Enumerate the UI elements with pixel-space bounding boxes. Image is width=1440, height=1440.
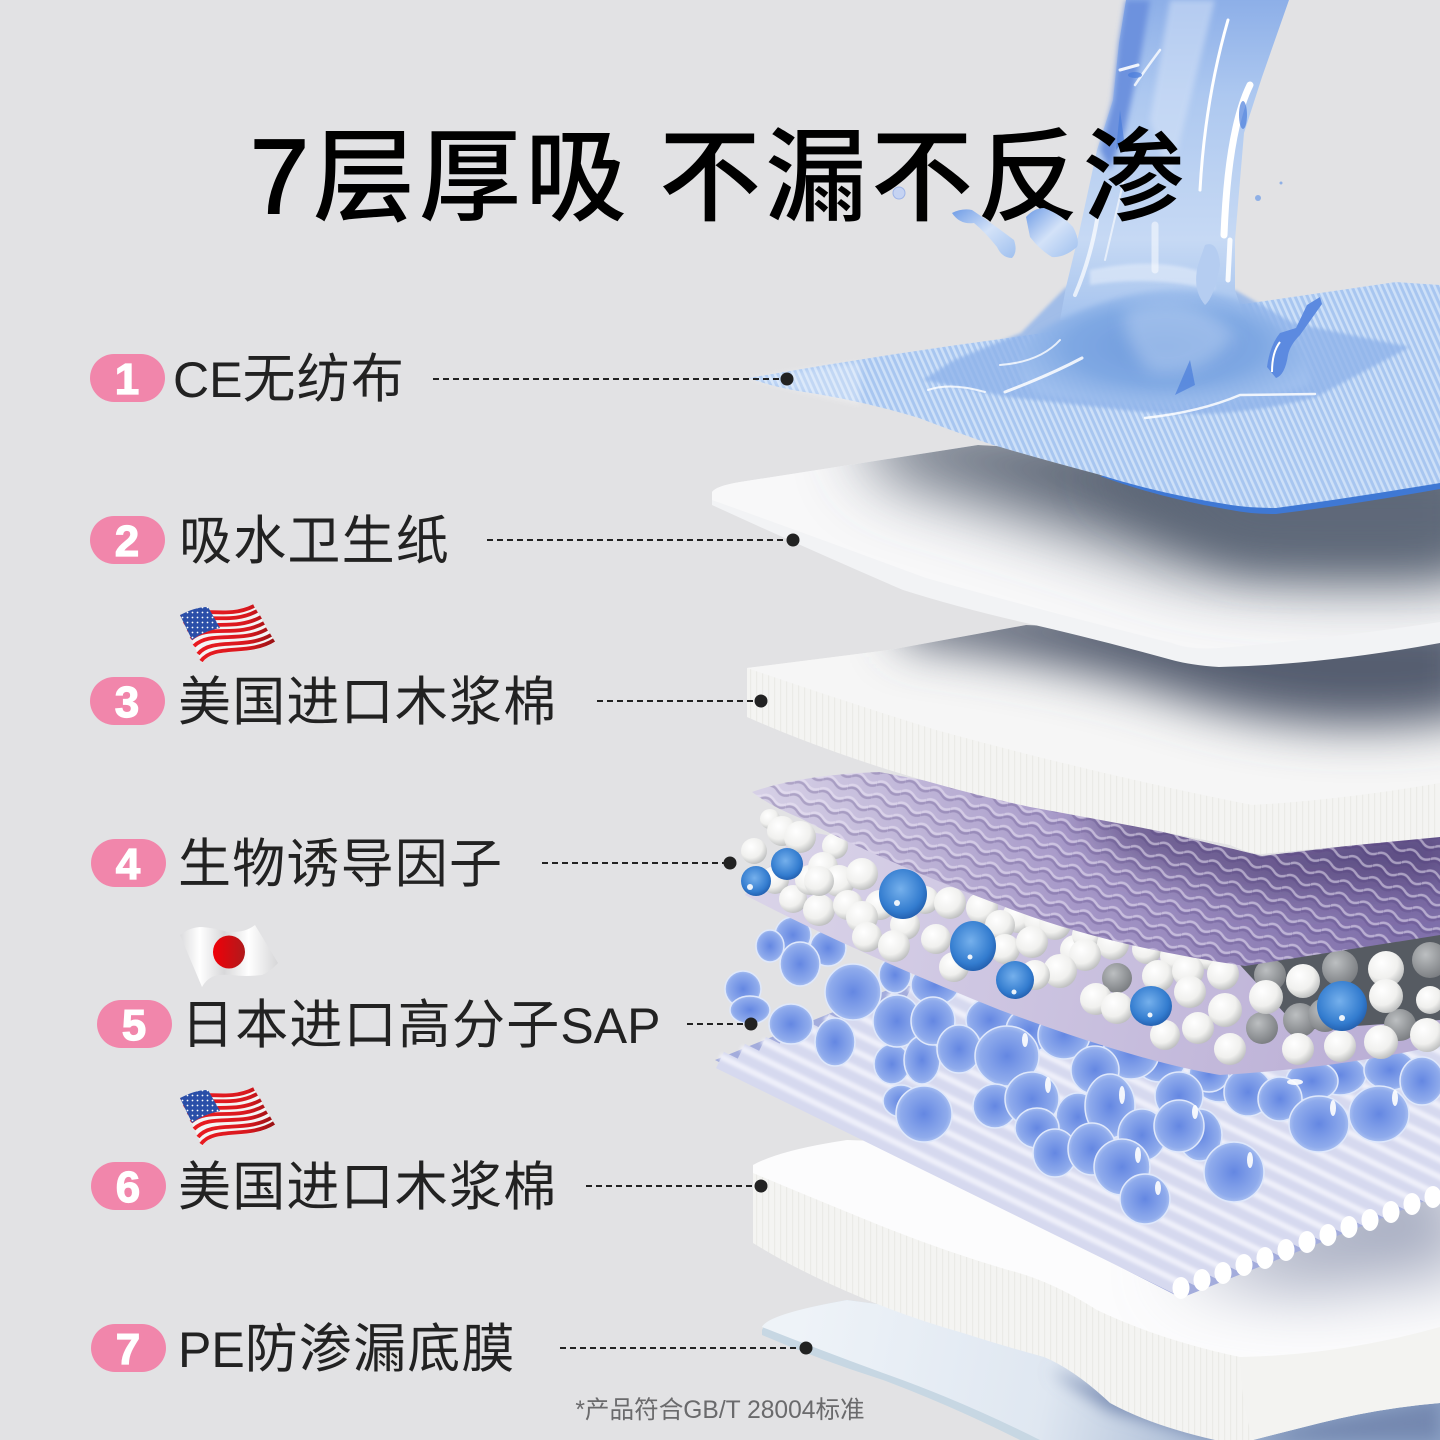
layer 4 upper sheet: biological inducer fabric: [752, 772, 1440, 966]
item 1: CE non-woven: CE无纺布: [173, 350, 405, 409]
icon: Japan flag: [180, 925, 278, 987]
item 1: CE non-woven: 1: [115, 355, 139, 404]
item 6: imported wood pulp: [91, 1158, 768, 1217]
item 6: imported wood pulp: 美国进口木浆棉: [178, 1158, 557, 1217]
item 5: imported SAP: 5: [122, 1001, 146, 1050]
layer 6: imported wood pulp pad: [753, 1140, 1440, 1440]
title: 7层厚吸: [250, 118, 631, 236]
item 2: absorbent tissue: 2: [115, 517, 139, 566]
footnote: *产品符合GB/T 28004标准: [575, 1396, 865, 1424]
item 4: biological inducer: [91, 835, 736, 894]
item 5: imported SAP: 日本进口高分子SAP: [181, 996, 660, 1055]
title: 不漏不反渗: [659, 121, 1189, 235]
layer 7: PE bottom film: [762, 1300, 1440, 1440]
item 4: biological inducer: 4: [116, 840, 141, 889]
item 7: PE anti-leak film: PE防渗漏底膜: [178, 1320, 516, 1379]
layer 1: CE non-woven surface: [749, 282, 1440, 514]
layer 2: absorbent tissue: [712, 445, 1440, 667]
item 7: PE anti-leak film: [91, 1320, 812, 1379]
icon: US flag: [180, 1087, 275, 1146]
item 3: imported wood pulp: 美国进口木浆棉: [178, 673, 557, 732]
icon: US flag: [180, 604, 275, 663]
water stream: [923, 0, 1410, 418]
water droplets and splashes: [893, 182, 1322, 378]
item 4: biological inducer: 生物诱导因子: [178, 835, 503, 894]
layer 5: SAP gel beads: [725, 917, 1440, 1224]
item 2: absorbent tissue: 吸水卫生纸: [179, 512, 450, 571]
tubes: channel layer: [715, 896, 1440, 1299]
item 2: absorbent tissue: [90, 512, 800, 571]
layer 4: white and blue inducer beads: [741, 809, 1440, 1065]
layer 4 lower sheet: [745, 830, 1440, 1075]
item 3: imported wood pulp: [90, 673, 768, 732]
item 1: CE non-woven: [90, 350, 794, 409]
layer 3: imported wood pulp pad: [747, 600, 1440, 854]
item 7: PE anti-leak film: 7: [116, 1325, 140, 1374]
item 6: imported wood pulp: 6: [116, 1163, 140, 1212]
item 3: imported wood pulp: 3: [115, 678, 139, 727]
